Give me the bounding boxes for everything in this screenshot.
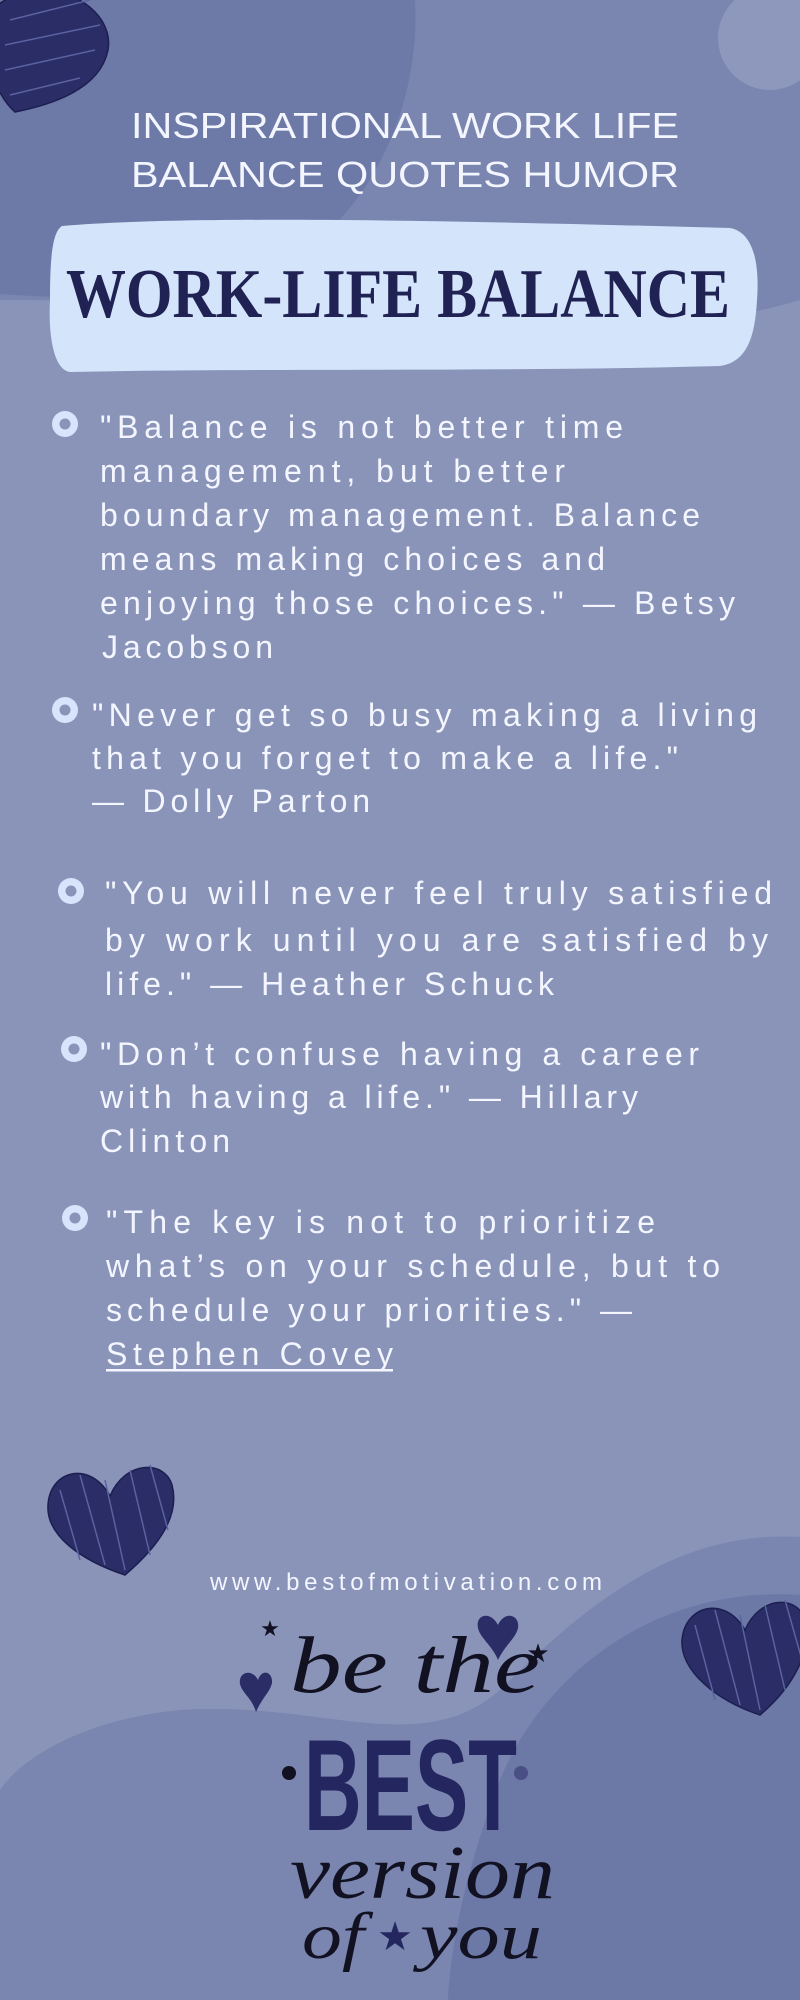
bullet [62,1205,88,1231]
quote 5: Stephen Covey: "The key is not to prioritize [106,1204,655,1240]
icon: heart right [682,1600,800,1715]
logo: be the best version of you: ★ [526,1639,550,1668]
quote 2: Dolly Parton: — Dolly Parton [92,783,370,819]
quote 2: Dolly Parton: "Never get so busy making a living [92,697,757,733]
quote 1: Betsy Jacobson [52,409,735,665]
quote 4: Hillary Clinton: Clinton [100,1123,230,1159]
quote 1: Betsy Jacobson: means making choices and [100,541,605,577]
title [131,105,679,195]
quote 4: Hillary Clinton: "Don’t confuse having a career [100,1036,699,1072]
quote 4: Hillary Clinton: with having a life." — Hillary [99,1079,638,1115]
icon: heart left [48,1465,174,1575]
bullet [52,411,78,437]
quote 3: Heather Schuck: by work until you are satisfied by [105,922,768,958]
quote 1: Betsy Jacobson: Jacobson [102,629,273,665]
logo: be the best version of you: ★ [260,1616,280,1641]
logo: be the best version of you [240,1616,555,1973]
icon: heart top-left [0,0,109,112]
quote 3: Heather Schuck [58,875,772,1002]
quote 5: Stephen Covey: schedule your priorities." — [106,1292,632,1328]
quote 3: Heather Schuck: life." — Heather Schuck [105,966,555,1002]
bullet [61,1036,87,1062]
title: BALANCE QUOTES HUMOR [131,154,679,195]
quote 1: Betsy Jacobson: boundary management. Balance [100,497,700,533]
logo: be the best version of you: version [290,1831,555,1915]
bullet [52,697,78,723]
quote 2: Dolly Parton [52,697,757,819]
logo: be the best version of you: be the [290,1622,540,1710]
banner: WORK-LIFE BALANCE [50,220,758,372]
quote 5: Stephen Covey [62,1204,720,1372]
bullet [58,878,84,904]
quote 1: Betsy Jacobson: management, but better [100,453,565,489]
quote 5: Stephen Covey: Stephen Covey [106,1336,393,1372]
logo: be the best version of you: of [302,1900,373,1973]
quote 1: Betsy Jacobson: enjoying those choices." — Betsy [100,585,735,621]
quote 2: Dolly Parton: that you forget to make a life." [92,740,678,776]
quote 4: Hillary Clinton [61,1036,699,1159]
quote 1: Betsy Jacobson: "Balance is not better time [100,409,623,445]
logo: be the best version of you: you [412,1900,542,1973]
title: INSPIRATIONAL WORK LIFE [131,105,679,146]
logo: be the best version of you: ★ [377,1914,413,1959]
logo: be the best version of you: BEST [304,1712,517,1858]
website url: www.bestofmotivation.com [209,1569,602,1596]
quote 3: Heather Schuck: "You will never feel truly satisfied [105,875,772,911]
quote 5: Stephen Covey: what’s on your schedule, but to [105,1248,720,1284]
